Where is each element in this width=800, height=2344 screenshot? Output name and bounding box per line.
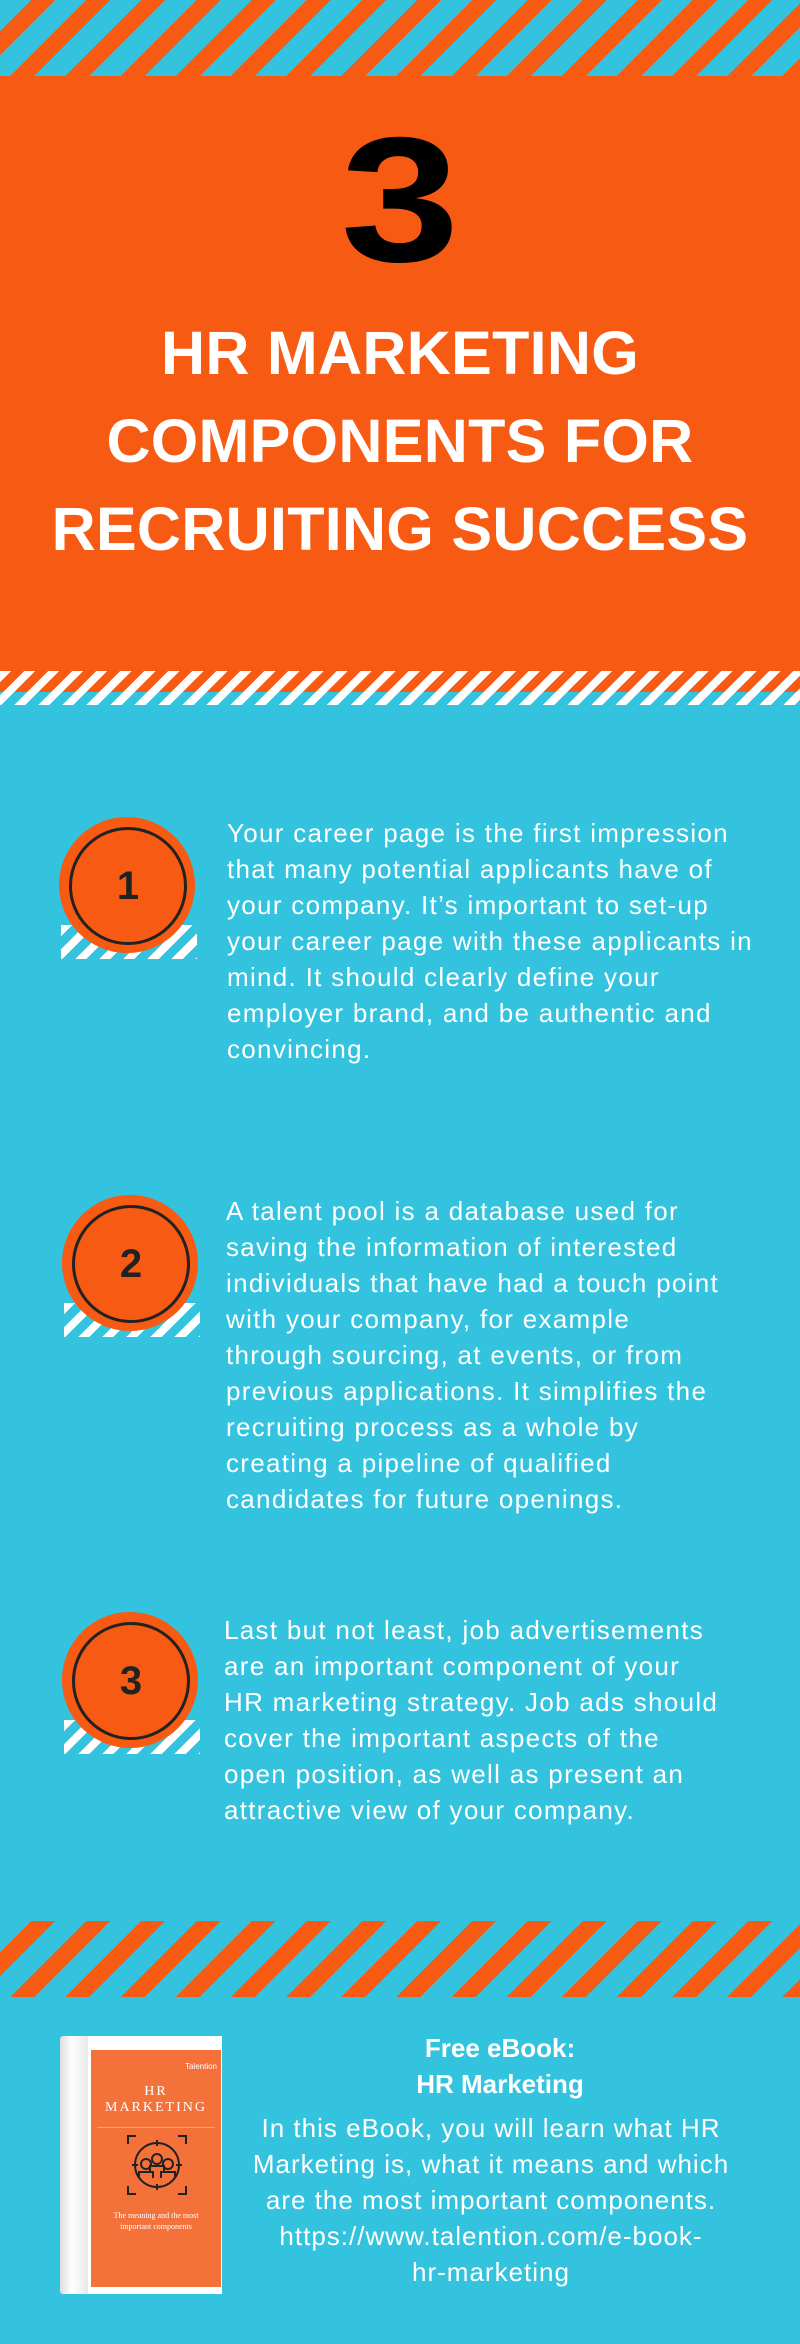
text 3: are an important component of your <box>224 1651 680 1681</box>
ebook cover: HR <box>144 2084 168 2099</box>
ebook description: are the most important components. <box>266 2185 716 2215</box>
text 2: creating a pipeline of qualified <box>226 1448 612 1478</box>
title <box>52 319 748 563</box>
title: HR MARKETING <box>161 319 639 387</box>
ebook heading: Free eBook: <box>425 2033 575 2063</box>
text 3: open position, as well as present an <box>224 1759 684 1789</box>
text 2: A talent pool is a database used for <box>226 1196 679 1226</box>
ebook heading <box>416 2033 584 2099</box>
text 1: mind. It should clearly define your <box>227 962 660 992</box>
text 3: cover the important aspects of the <box>224 1723 660 1753</box>
header panel <box>0 76 800 671</box>
title: RECRUITING SUCCESS <box>52 495 748 563</box>
text 2: saving the information of interested <box>226 1232 677 1262</box>
text 3: HR marketing strategy. Job ads should <box>224 1687 718 1717</box>
badge 1: 1 <box>117 864 139 908</box>
white stripe band <box>0 671 800 705</box>
item 2 <box>62 1195 719 1514</box>
text 3: attractive view of your company. <box>224 1795 635 1825</box>
text 1: Your career page is the first impression <box>227 818 729 848</box>
ebook description: hr-marketing <box>412 2257 570 2287</box>
badge 1 <box>59 817 197 959</box>
ebook description <box>253 2113 729 2287</box>
ebook cover <box>60 2036 222 2294</box>
ebook description: Marketing is, what it means and which <box>253 2149 729 2179</box>
ebook cover: MARKETING <box>105 2100 207 2115</box>
ebook cover: Talention <box>185 2062 217 2071</box>
text 1: that many potential applicants have of <box>227 854 713 884</box>
badge 2 <box>62 1195 200 1337</box>
ebook cover: The meaning and the most <box>114 2211 198 2220</box>
text 3 <box>224 1615 718 1825</box>
badge 3: 3 <box>120 1659 142 1703</box>
text 2: recruiting process as a whole by <box>226 1412 639 1442</box>
top stripes <box>0 0 800 76</box>
text 2: previous applications. It simplifies the <box>226 1376 707 1406</box>
ebook cover: important components <box>120 2222 192 2231</box>
text 1: convincing. <box>227 1034 371 1064</box>
text 2: individuals that have had a touch point <box>226 1268 719 1298</box>
badge 3 <box>62 1612 200 1754</box>
text 1 <box>227 818 753 1064</box>
icon: target people <box>127 2135 187 2195</box>
text 1: employer brand, and be authentic and <box>227 998 712 1028</box>
ebook description: In this eBook, you will learn what HR <box>262 2113 720 2143</box>
text 2 <box>226 1196 719 1514</box>
text 2: with your company, for example <box>226 1304 630 1334</box>
big number 3: 3 <box>341 100 459 299</box>
text 2: candidates for future openings. <box>226 1484 623 1514</box>
text 2: through sourcing, at events, or from <box>226 1340 683 1370</box>
item 1 <box>59 817 753 1064</box>
bottom stripes <box>0 1921 800 1997</box>
badge 2: 2 <box>120 1242 142 1286</box>
item 3 <box>62 1612 718 1825</box>
text 3: Last but not least, job advertisements <box>224 1615 704 1645</box>
text 1: your company. It’s important to set-up <box>227 890 709 920</box>
ebook heading: HR Marketing <box>416 2069 584 2099</box>
ebook description: https://www.talention.com/e-book- <box>279 2221 703 2251</box>
text 1: your career page with these applicants in <box>227 926 753 956</box>
title: COMPONENTS FOR <box>106 407 694 475</box>
